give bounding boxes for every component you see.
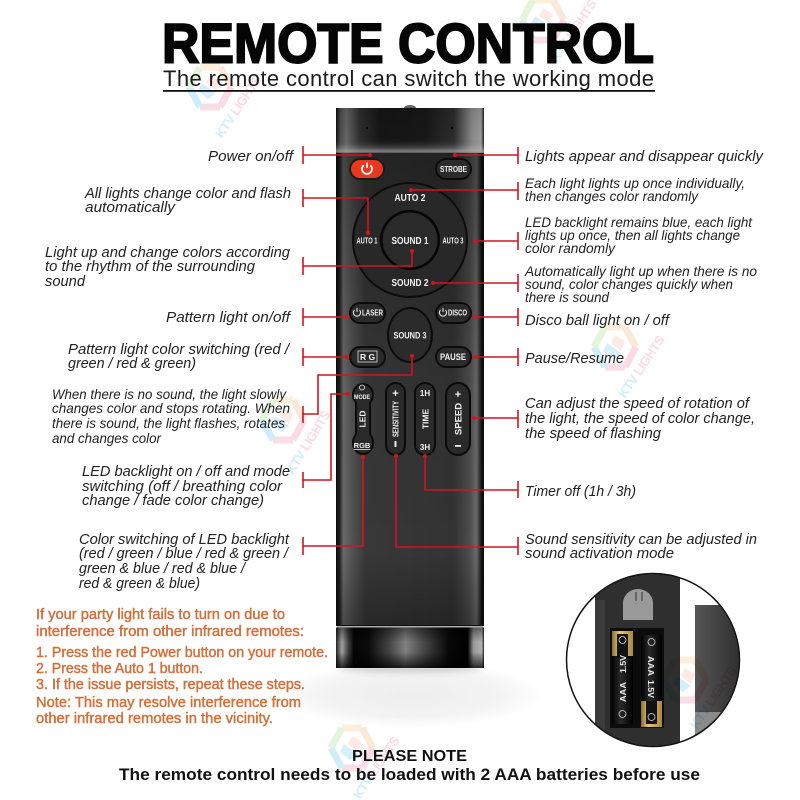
watermark: KTV Lights logos: KTV LIGHTS [615, 332, 668, 401]
label: auto 3 [525, 214, 753, 256]
button wheel: AUTO 1 [356, 236, 378, 246]
label: auto 2: then changes color randomly [525, 188, 699, 204]
label: pattern colour [68, 341, 291, 372]
label: led backlight: switching (off / breathing color [82, 478, 283, 495]
text: battery note: The remote control needs to be loaded with 2 AAA batteries before use [119, 765, 700, 784]
watermark: KTV Lights logos: KTV LIGHTS [283, 407, 334, 477]
slider: mode led rgb: MODE [354, 394, 371, 401]
label: all lights [84, 185, 291, 216]
slider: time: TIME [420, 409, 430, 429]
label: sensitivity: Sound sensitivity can be adjusted in [525, 531, 757, 548]
button: sound 3 [387, 307, 433, 363]
label: auto 3: LED backlight remains blue, each light [525, 214, 753, 230]
top nub [404, 105, 416, 111]
label: auto 3: color randomly [525, 240, 616, 256]
button: sound 3: SOUND 3 [394, 330, 426, 340]
button wheel: SOUND 1 [392, 236, 429, 247]
title: REMOTE CONTROL [162, 12, 654, 74]
slider: mode led rgb: RGB [354, 441, 371, 450]
button: disco: DISCO [448, 308, 467, 318]
button wheel: AUTO 3 [442, 236, 464, 246]
battery inset [566, 570, 745, 750]
label: led backlight: LED backlight on / off and mode [82, 463, 290, 480]
label: sound 2: sound, color changes quickly when [525, 276, 733, 292]
label: light up to rhythm [45, 244, 291, 290]
slider: sensitivity: SENSITIVITY [392, 401, 400, 437]
battery compartment [610, 628, 664, 728]
text block: interference note: Note: This may resolve interference from [36, 695, 301, 711]
slider: speed: SPEED [454, 403, 464, 435]
bottom cap [336, 625, 484, 668]
subtitle: The remote control can switch the working mode [163, 66, 654, 91]
label: sound 2: there is sound [525, 289, 610, 305]
button: laser: LASER [362, 308, 383, 318]
label: colour switching: (red / green / blue / red & green / [79, 545, 290, 562]
label: auto 3: lights up once, then all lights change [525, 227, 740, 243]
label: all lights: automatically [85, 199, 177, 216]
label: auto 2: Each light lights up once individually, [525, 175, 745, 191]
watermark: KTV Lights logos: KTV LIGHTS [350, 733, 403, 800]
slider: mode led rgb [352, 383, 374, 455]
battery left [612, 631, 633, 724]
panel: remote control body [336, 105, 484, 668]
battery clip [623, 589, 653, 620]
label: speed: the speed of flashing [525, 425, 662, 442]
button: strobe: STROBE [440, 164, 467, 174]
shadow under remote [275, 662, 545, 728]
battery left: AAA [618, 682, 628, 702]
label: sensitivity [525, 531, 757, 562]
button wheel: SOUND 2 [392, 278, 429, 289]
label: timer: Timer off (1h / 3h) [525, 483, 636, 500]
heading: please note: PLEASE NOTE [352, 748, 467, 765]
slider: time: 1H [420, 389, 430, 398]
text block: interference note [36, 607, 328, 727]
text block: interference note: 2. Press the Auto 1 button. [36, 661, 203, 677]
text block: interference note: interference from other infrared remotes: [36, 624, 304, 640]
slider: sensitivity [385, 382, 406, 456]
text block: interference note: If your party light fails to turn on due to [36, 607, 285, 623]
label: no sound behaviour: changes color and stops rotating. When [52, 400, 290, 416]
button: laser [349, 302, 386, 324]
label: strobe: Lights appear and disappear quickly [525, 148, 764, 165]
label: led backlight [82, 463, 290, 509]
label: no sound behaviour [52, 386, 290, 446]
button: power [349, 158, 385, 180]
label: pause: Pause/Resume [525, 350, 624, 367]
battery right [641, 635, 662, 727]
button wheel [352, 182, 468, 298]
label: no sound behaviour: there is sound, the light flashes, rotates [52, 415, 285, 431]
label: colour switching: green & blue / red & blue / [79, 560, 247, 577]
text block: interference note: 1. Press the red Power button on your remote. [36, 645, 328, 661]
label: pattern colour: green / red & green) [68, 355, 196, 372]
label: light up to rhythm: to the rhythm of the surrounding [45, 258, 256, 275]
text block: interference note: 3. If the issue persists, repeat these steps. [36, 677, 305, 693]
label: speed: the light, the speed of color change, [525, 410, 755, 427]
label: speed: Can adjust the speed of rotation of [525, 395, 751, 412]
watermark: KTV Lights logos: KTV LIGHTS [687, 663, 740, 732]
label: light up to rhythm: Light up and change colors according [45, 244, 291, 261]
label: colour switching [79, 531, 290, 592]
label: pattern colour: Pattern light color switching (red / [68, 341, 291, 358]
label: sound 2: Automatically light up when there is no [524, 263, 757, 279]
slider: time: 3H [420, 443, 430, 452]
label: auto 2 [525, 175, 745, 204]
label: light up to rhythm: sound [45, 273, 86, 290]
slider: sensitivity: + [392, 388, 399, 400]
label: no sound behaviour: and changes color [52, 430, 162, 446]
label: power on/off: Power on/off [208, 148, 295, 165]
label: disco: Disco ball light on / off [525, 312, 671, 329]
button: pause [435, 346, 472, 368]
button: red green: R G [360, 352, 375, 362]
slider: speed: + [455, 389, 461, 401]
battery left: 1.5V [618, 655, 628, 673]
body [336, 153, 484, 626]
watermark: KTV Lights logos: KTV LIGHTS [212, 72, 265, 141]
button wheel: AUTO 2 [394, 193, 426, 204]
label: all lights: All lights change color and flash [84, 185, 291, 202]
label: sound 2 [524, 263, 757, 305]
text block: interference note: other infrared remotes in the vicinity. [36, 711, 273, 727]
slider: time [414, 382, 436, 456]
battery right: AAA [646, 656, 656, 676]
button: pause: PAUSE [440, 352, 466, 362]
label: led backlight: change / fade color change) [82, 492, 264, 509]
callout lines [303, 146, 518, 555]
label: pattern light: Pattern light on/off [166, 309, 292, 326]
label: speed [525, 395, 755, 442]
slider: mode led rgb: LED [358, 410, 368, 428]
button: disco [435, 302, 472, 324]
button: strobe [435, 158, 472, 180]
label: sensitivity: sound activation mode [525, 545, 674, 562]
label: colour switching: red & green & blue) [79, 575, 200, 592]
battery right: 1.5V [646, 680, 656, 698]
label: no sound behaviour: When there is no sound, the light slowly [52, 386, 287, 402]
top cap [336, 108, 484, 153]
label: colour switching: Color switching of LED backlight [79, 531, 290, 548]
button: red green [349, 346, 386, 368]
slider: speed [445, 382, 471, 456]
watermark: KTV Lights logos [189, 0, 740, 800]
